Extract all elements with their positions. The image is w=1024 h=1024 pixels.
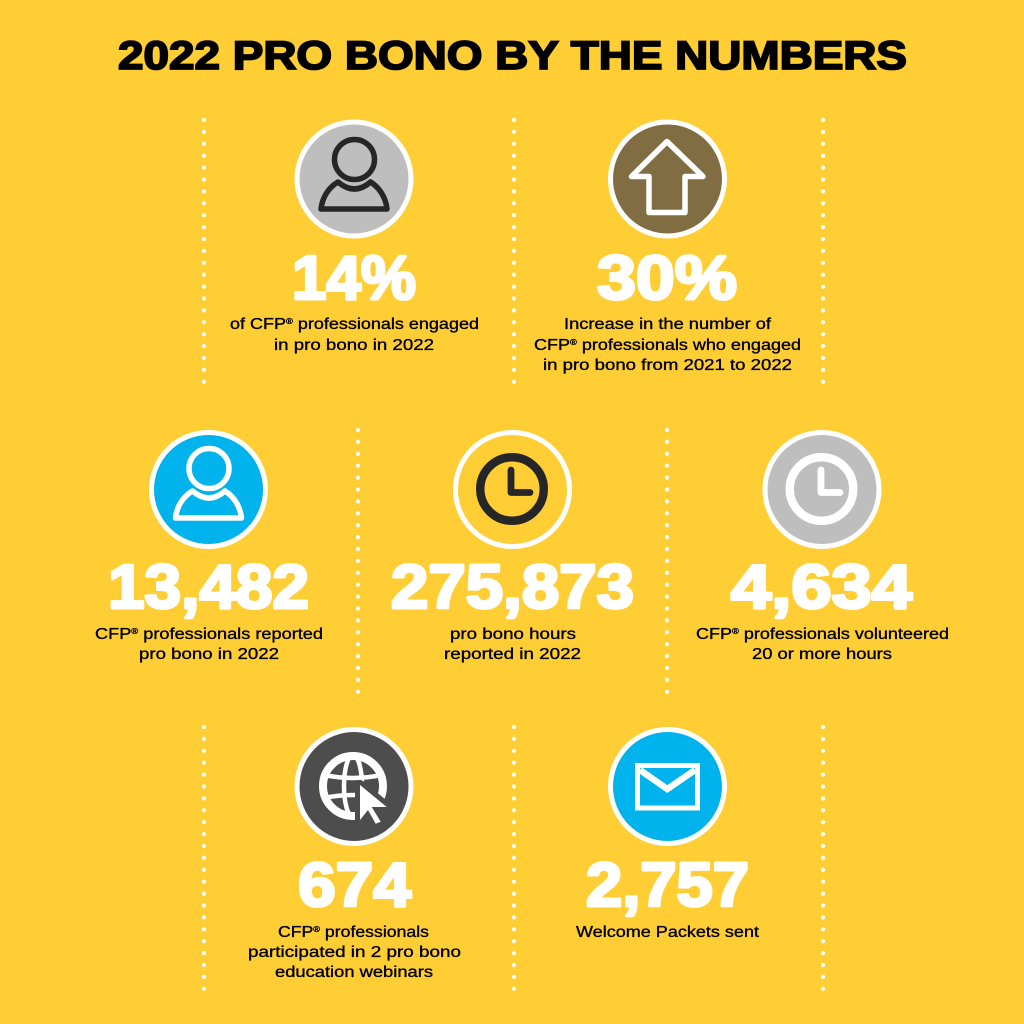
statistic: 30%: 30% [597, 244, 737, 313]
title: 2022 PRO BONO BY THE NUMBERS [118, 34, 907, 78]
statistic: 4,634: 4,634 [731, 553, 913, 622]
description: 674: professionals [320, 924, 429, 941]
statistic: 13,482: 13,482 [108, 553, 309, 622]
panel: 674 webinars [248, 730, 461, 981]
panel: 13,482 reported [95, 432, 323, 663]
description: 13,482: professionals reported [138, 626, 323, 643]
panel: 275,873 hours [391, 432, 634, 663]
statistic: 275,873: 275,873 [391, 553, 634, 622]
description: 13,482: pro bono in 2022 [139, 646, 279, 663]
icon: up arrow on brown circle [610, 122, 724, 236]
description: 275,873: reported in 2022 [444, 646, 581, 663]
description: 30%: in pro bono from 2021 to 2022 [543, 357, 792, 374]
description: 14%: ® [286, 317, 293, 326]
icon: envelope on blue circle [610, 730, 724, 844]
panel: 4,634 volunteered [696, 432, 949, 663]
statistic: 2,757: 2,757 [586, 851, 749, 920]
description: 275,873 [444, 626, 581, 663]
icon: white clock on grey circle [765, 432, 879, 546]
description: 674: education webinars [275, 964, 433, 981]
description: 14%: in pro bono in 2022 [274, 337, 434, 354]
description: 674: CFP [278, 924, 309, 941]
description: 4,634: professionals volunteered [739, 626, 949, 643]
description: 30% [534, 316, 801, 374]
panel: 30% increase [534, 122, 801, 374]
statistic: 14%: 14% [292, 244, 416, 313]
icon: globe and cursor on dark circle [297, 730, 411, 844]
description: 13,482 [95, 626, 323, 663]
description: 674: participated in 2 pro bono [248, 944, 461, 961]
description: 4,634 [696, 626, 949, 663]
description: 30%: Increase in the number of [564, 316, 772, 333]
panel: 14% of professionals [230, 122, 479, 354]
description: 30%: professionals who engaged [577, 337, 801, 354]
description: 14%: of CFP [230, 316, 278, 333]
statistic: 674: 674 [298, 851, 412, 920]
icon: person on grey circle [297, 122, 411, 236]
panel: 2,757 welcome packets [576, 730, 760, 941]
description: 4,634: ® [732, 627, 739, 636]
description: 30%: CFP [534, 337, 565, 354]
description: 674: ® [313, 925, 320, 934]
description: 674 [248, 924, 461, 981]
icon: person on blue circle [152, 432, 266, 546]
icon: dark clock on yellow circle [456, 432, 570, 546]
description: 4,634: 20 or more hours [752, 646, 892, 663]
description: 2,757: Welcome Packets sent [576, 924, 760, 941]
description: 275,873: pro bono hours [450, 626, 576, 643]
description: 30%: ® [570, 338, 577, 347]
description: 14% [230, 316, 479, 354]
description: 14%: professionals engaged [293, 316, 479, 333]
description: 13,482: ® [131, 627, 138, 636]
description: 13,482: CFP [95, 626, 126, 643]
description: 4,634: CFP [696, 626, 727, 643]
